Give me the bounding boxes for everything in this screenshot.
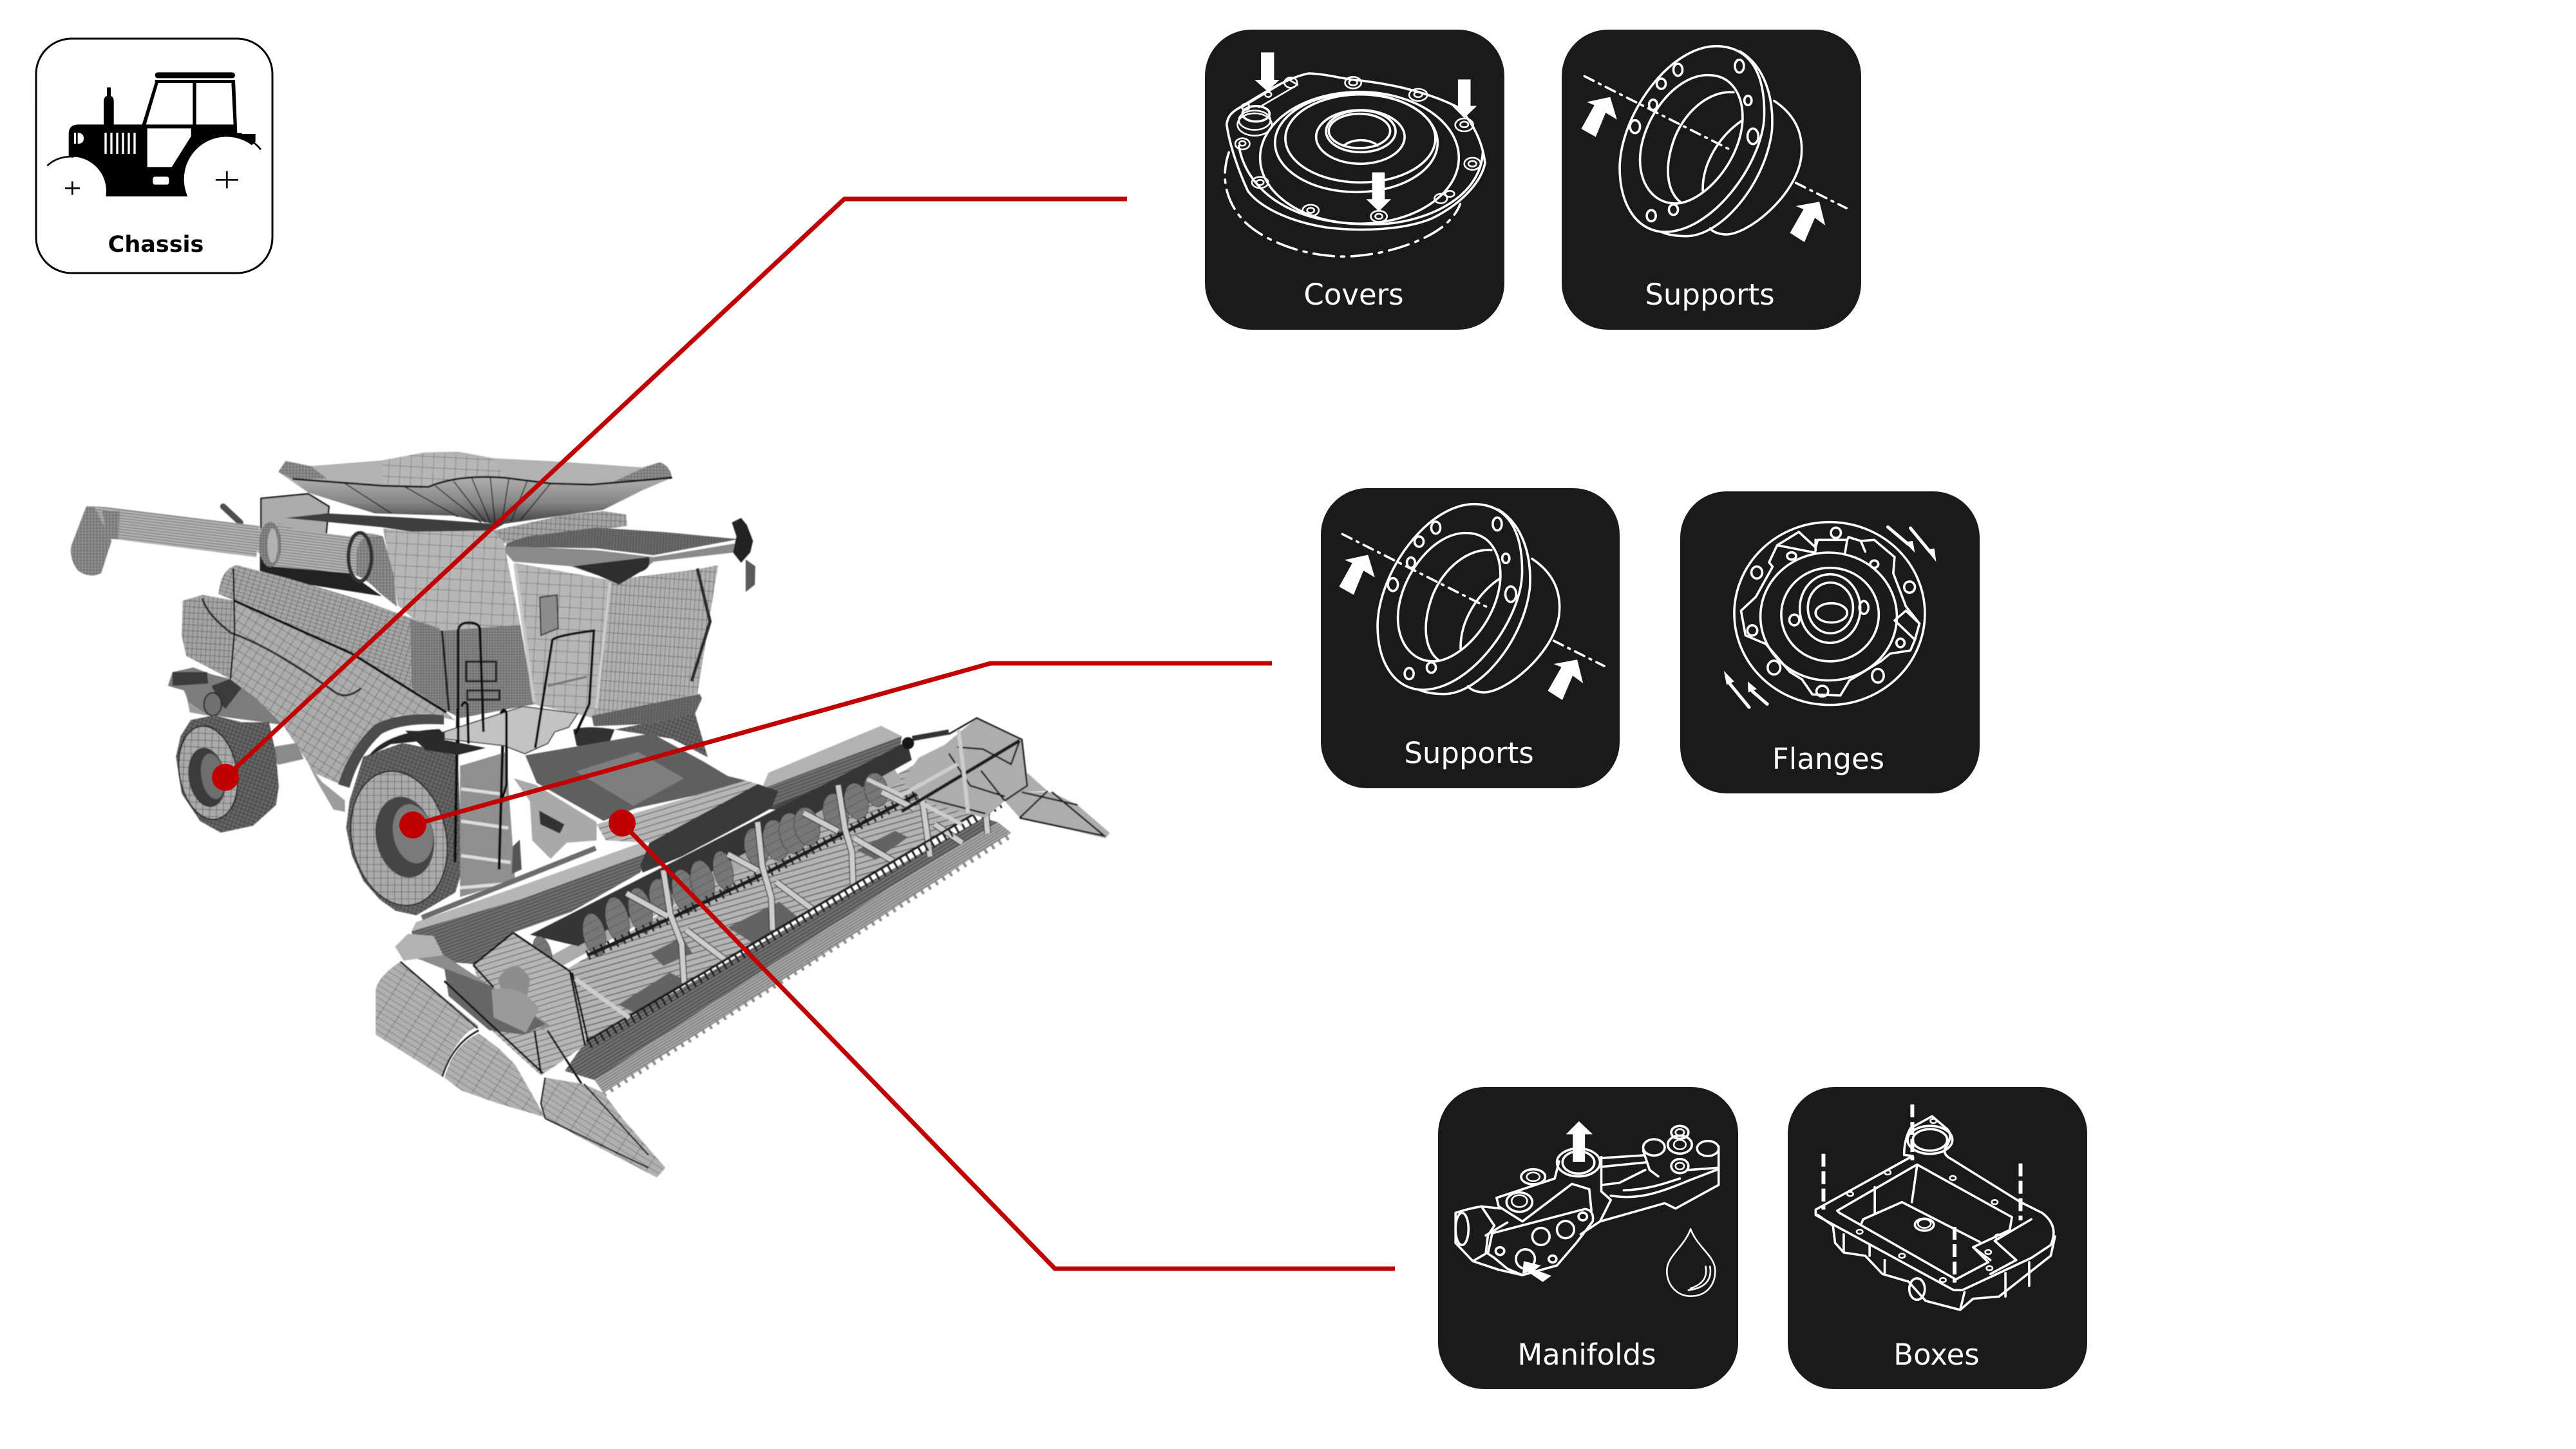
cab lamp	[573, 727, 614, 748]
dark recess	[260, 553, 382, 596]
wiper	[692, 569, 710, 681]
reel arms	[627, 739, 988, 983]
icon: oil pan box	[1815, 1104, 2055, 1310]
underbody shade	[308, 764, 345, 812]
label: Supports	[1645, 278, 1775, 312]
underside parts	[168, 667, 283, 725]
panel: covers	[1205, 30, 1504, 330]
reel tines	[587, 739, 1020, 956]
grain hopper	[278, 451, 672, 524]
icon: support flange	[1581, 46, 1846, 242]
auger second section	[255, 522, 397, 607]
label: Covers	[1303, 278, 1404, 312]
ladder structure	[455, 708, 522, 897]
engine block	[410, 619, 534, 718]
reel arm shadows	[627, 739, 988, 983]
cab windows	[515, 563, 718, 718]
tank lid	[286, 511, 627, 542]
auger tube	[516, 775, 898, 983]
combine harvester wireframe	[71, 451, 1110, 1177]
auger tube	[88, 506, 260, 557]
callout line: supports and flanges	[399, 663, 1272, 838]
top cap	[395, 934, 443, 961]
panel: manifolds	[1438, 1087, 1738, 1389]
auger, cover and reel	[516, 739, 1020, 983]
feeder panels	[576, 752, 684, 806]
handrails	[458, 623, 594, 805]
rear tire	[172, 715, 303, 833]
header floor	[567, 764, 1000, 1041]
cab roof	[506, 527, 739, 585]
work lamp	[540, 595, 558, 635]
icon: support flange	[1339, 504, 1604, 700]
reel tine bar	[587, 739, 1020, 956]
feeder housing	[514, 734, 776, 859]
icon: manifold	[1455, 1121, 1719, 1296]
icon: tractor	[37, 72, 269, 225]
panel seams	[401, 961, 478, 1077]
front tire sidewall	[339, 762, 459, 914]
panel: supports (middle)	[1321, 488, 1620, 788]
feeder front strip	[596, 781, 776, 843]
frame box	[473, 933, 629, 1075]
icon: cover plate	[1225, 52, 1485, 256]
engine block and cab	[410, 518, 755, 757]
rear box, tank and hopper	[261, 451, 672, 630]
left panel	[375, 961, 478, 1077]
middle panel	[444, 1034, 545, 1117]
dark step area	[405, 731, 486, 755]
grain tank	[383, 525, 627, 630]
panel: supports (top)	[1562, 30, 1861, 330]
fender arch	[338, 714, 448, 788]
platform and handrails	[405, 623, 614, 805]
cab base	[592, 694, 702, 726]
label: Supports	[1404, 736, 1534, 770]
panel: flanges	[1680, 491, 1980, 793]
pointed tip	[541, 1077, 665, 1177]
lower side panel	[182, 569, 455, 784]
beam and bracket	[417, 955, 582, 1084]
category badge: chassis	[36, 39, 272, 273]
finger row	[586, 799, 1000, 1045]
unloading auger and side panels	[71, 506, 455, 784]
side mirror	[732, 518, 755, 592]
dark recess	[530, 741, 912, 946]
auger rod	[223, 506, 240, 522]
label: Manifolds	[1517, 1338, 1656, 1372]
feeder side	[514, 779, 596, 859]
upper side panel	[218, 565, 447, 713]
left end of header	[375, 933, 665, 1177]
rear box	[261, 494, 329, 545]
callout line: covers and supports	[212, 199, 1127, 791]
header rear wall	[412, 726, 902, 964]
icon: flange	[1724, 522, 1936, 707]
label: Flanges	[1772, 742, 1884, 776]
cutter bar	[565, 818, 1011, 1095]
callout line: manifolds and boxes	[609, 810, 1395, 1269]
auger flights	[529, 771, 891, 976]
label: Boxes	[1893, 1338, 1980, 1372]
under cab mesh	[614, 714, 708, 757]
badge label: Chassis	[108, 232, 204, 258]
front wheel, fender and ladder	[308, 708, 522, 915]
auger cover	[640, 784, 779, 873]
auger collar	[102, 511, 120, 539]
auger spout	[71, 506, 111, 576]
right end frame	[867, 718, 1110, 838]
panel: boxes	[1788, 1087, 2087, 1389]
feeder top plate	[526, 734, 746, 821]
front tire tread	[346, 743, 462, 915]
platform	[444, 706, 578, 753]
